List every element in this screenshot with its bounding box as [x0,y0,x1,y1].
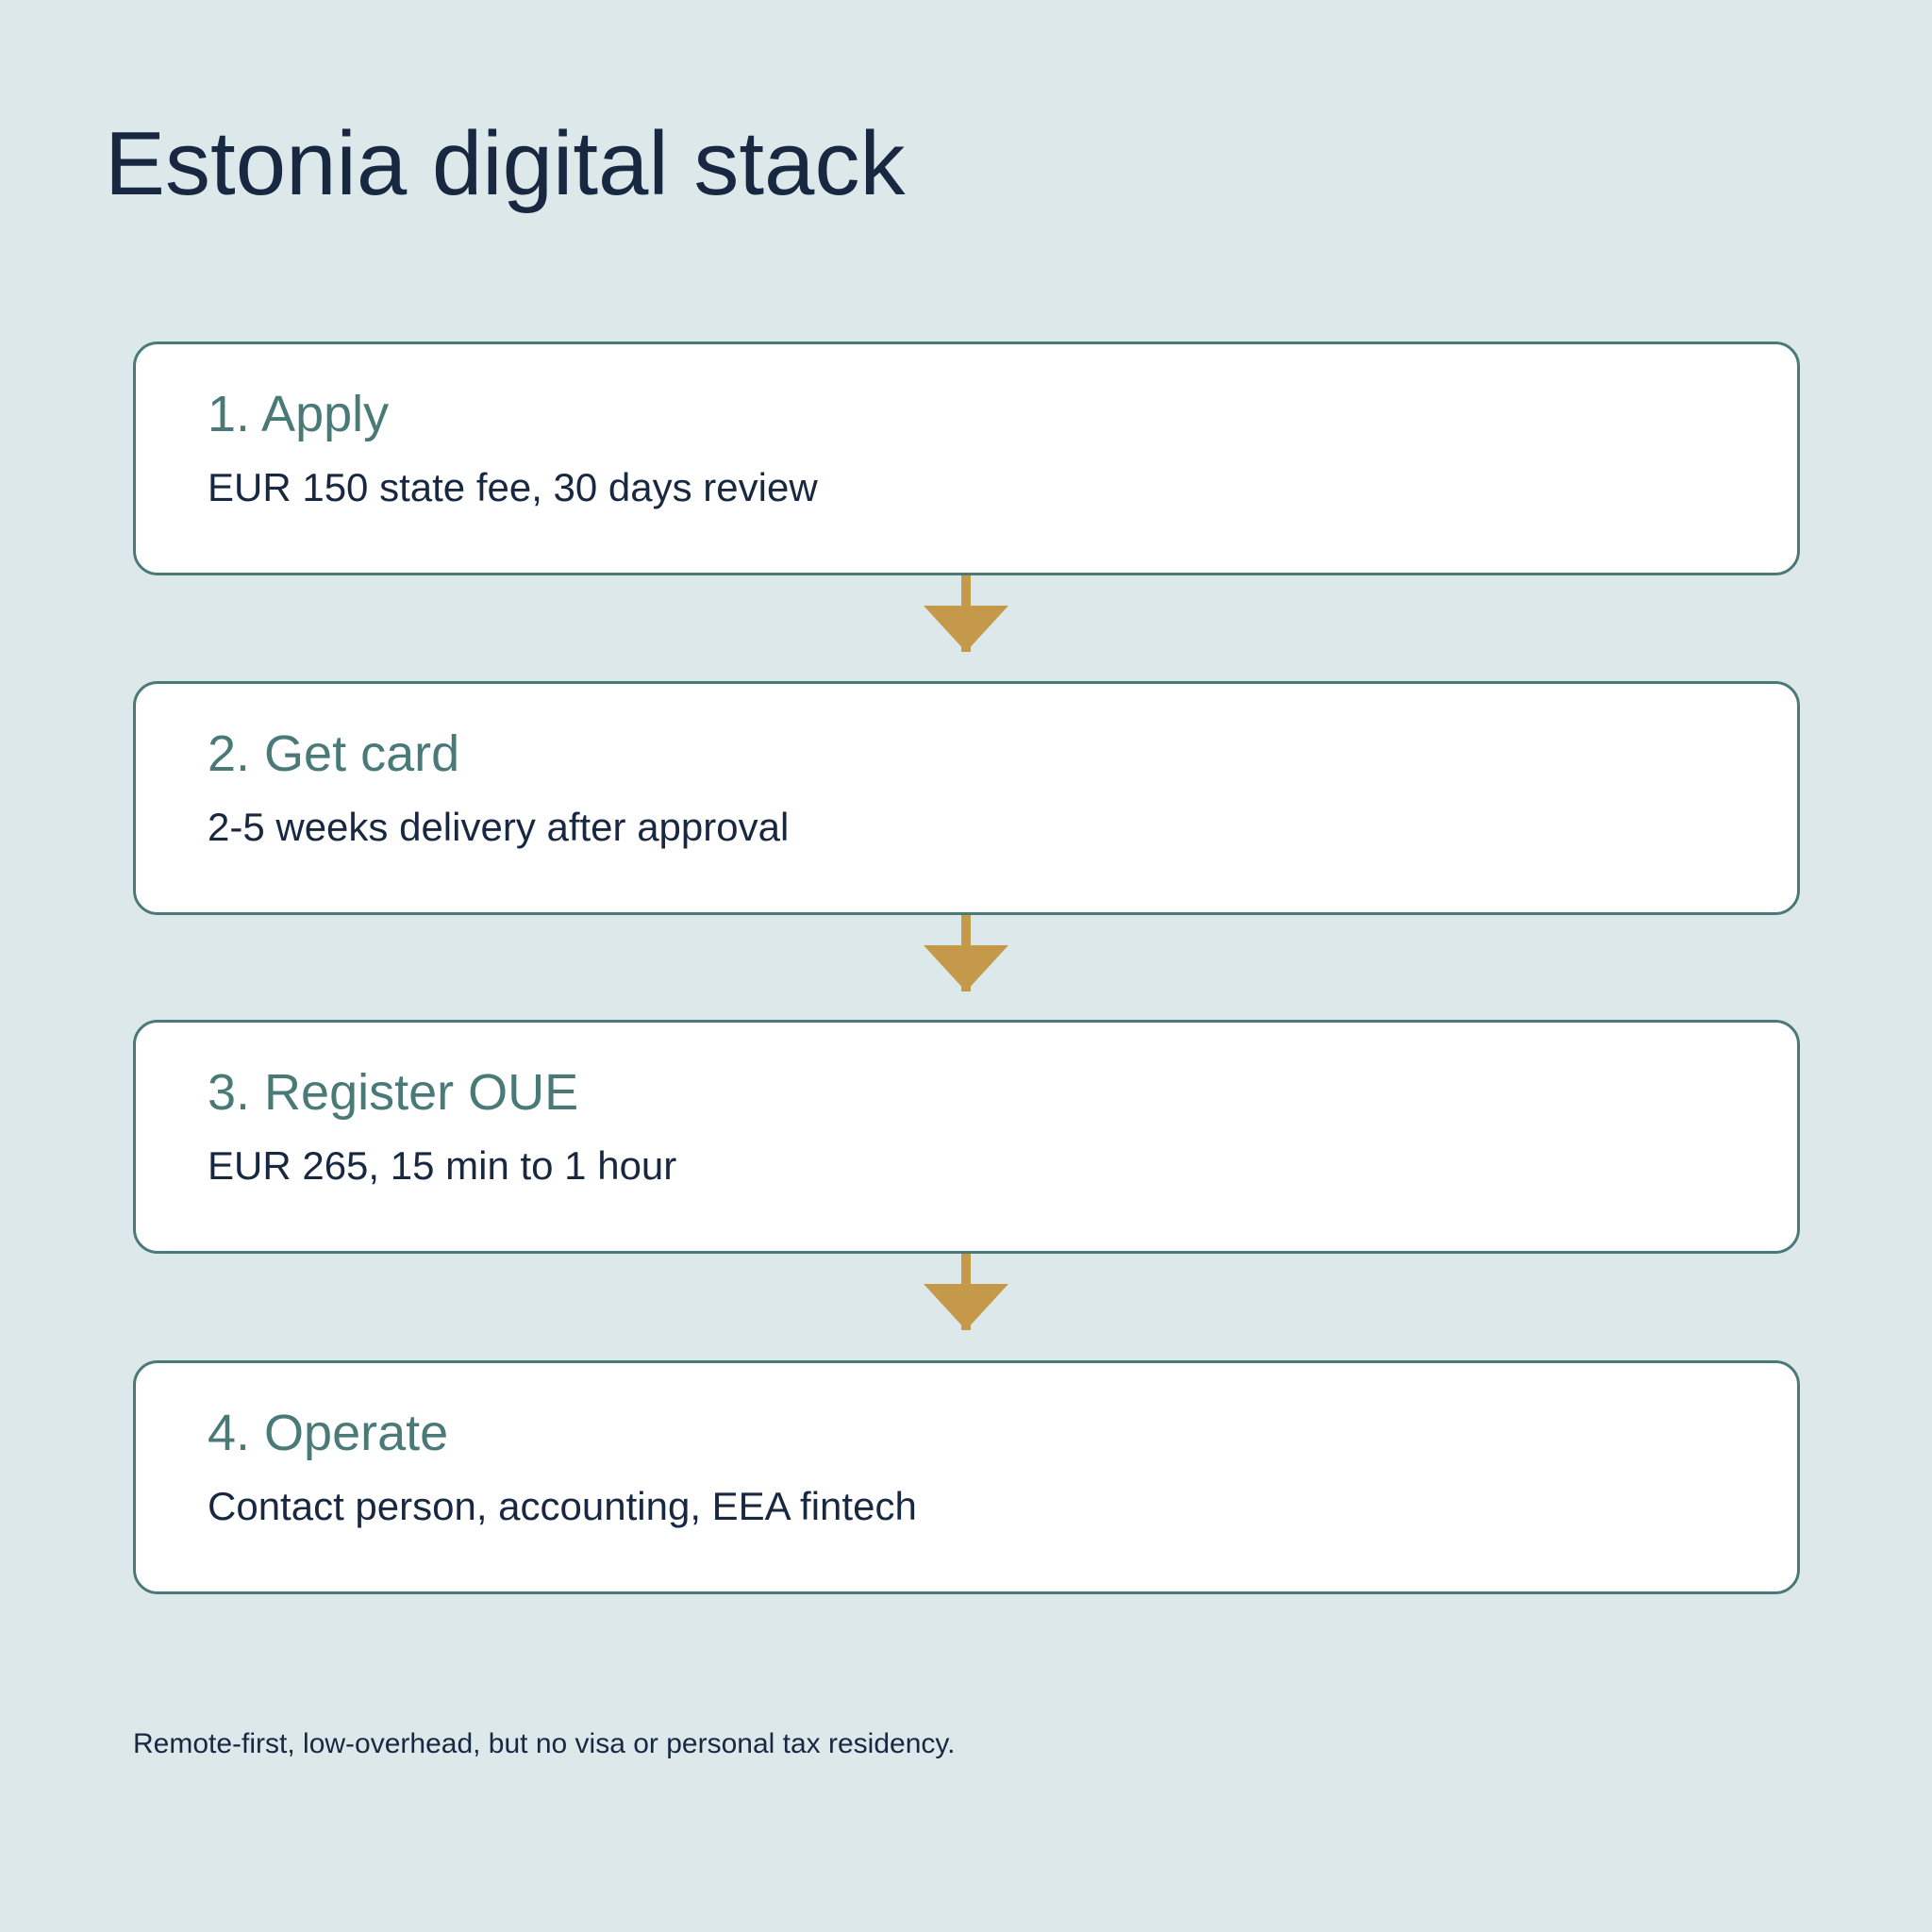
panel: step 1 [133,341,1800,575]
footer note: Remote-first, low-overhead, but no visa or personal tax residency. [133,1728,956,1759]
text: step 3: EUR 265, 15 min to 1 hour [208,1143,676,1188]
title: Estonia digital stack [105,113,905,214]
heading: step 3: 3. Register OUE [208,1064,578,1121]
heading: step 2: 2. Get card [208,725,459,782]
text: step 1: EUR 150 state fee, 30 days review [208,465,818,509]
panel: step 3 [133,1020,1800,1254]
panel: step 4 [133,1360,1800,1594]
heading: step 4: 4. Operate [208,1405,448,1461]
panel: step 2 [133,681,1800,915]
heading: step 1: 1. Apply [208,386,389,442]
arrow 3 [924,1254,1008,1330]
arrow 2 [924,915,1008,991]
arrow 1 [924,575,1008,652]
text: step 4: Contact person, accounting, EEA fintech [208,1484,917,1528]
text: step 2: 2-5 weeks delivery after approval [208,805,789,849]
